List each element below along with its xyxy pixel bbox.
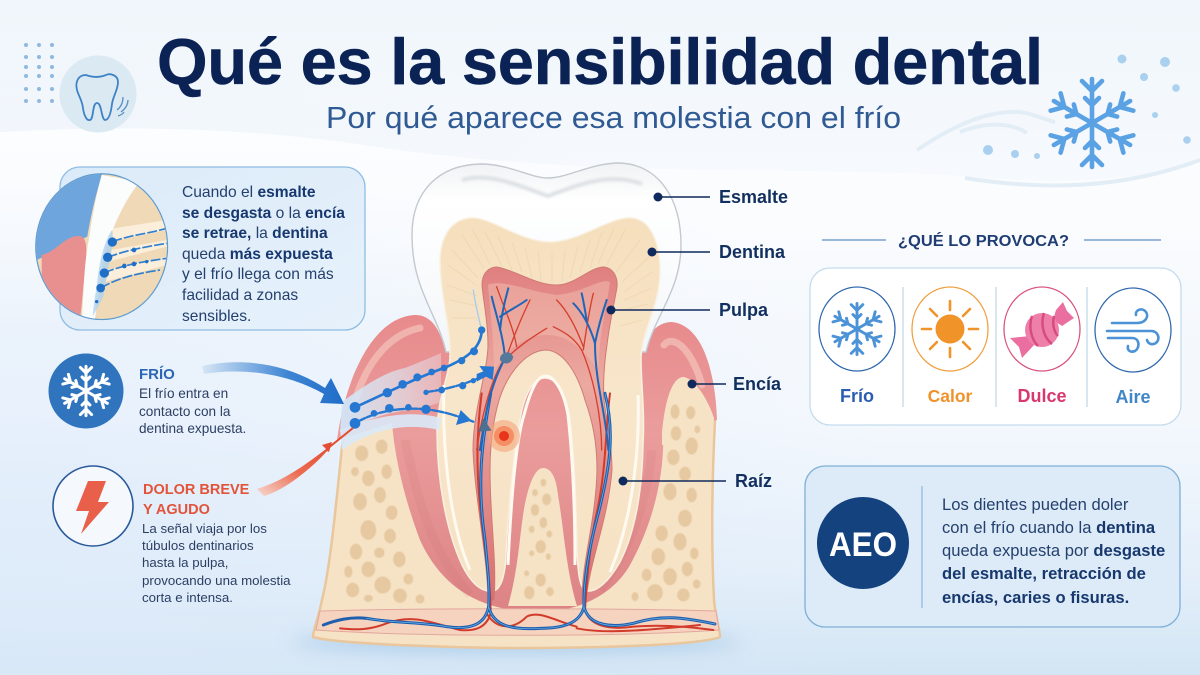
trigger: heat: Calor xyxy=(928,386,973,406)
text block: cold xyxy=(139,366,246,436)
right bone cap xyxy=(662,377,714,445)
panel text: se retrae, la dentina xyxy=(182,225,328,242)
text block: pain: corta e intensa. xyxy=(142,590,233,605)
panel text: facilidad a zonas xyxy=(182,287,298,304)
text block: pain: Y AGUDO xyxy=(143,502,210,518)
trigger: cold xyxy=(819,287,895,406)
label: Pulpa xyxy=(606,300,769,320)
arrow: cold to dentin xyxy=(202,362,344,404)
icon: pain bolt xyxy=(53,466,133,546)
inset: close-up of exposed dentin xyxy=(33,170,173,323)
heading: triggers: ¿QUÉ LO PROVOCA? xyxy=(898,231,1069,250)
text block: cold: contacto con la xyxy=(139,404,231,419)
text block: pain: hasta la pulpa, xyxy=(142,555,228,570)
panel text xyxy=(182,184,345,325)
AEO badge: AEO xyxy=(829,526,897,564)
decorative dot grid xyxy=(24,43,54,103)
translucent exposure band xyxy=(340,353,441,432)
panel text: queda más expuesta xyxy=(182,246,333,263)
trigger: air xyxy=(1095,288,1171,407)
label: Raíz: Raíz xyxy=(735,471,772,491)
summary text: encías, caries o fisuras. xyxy=(942,588,1129,607)
label: Encía xyxy=(688,374,782,394)
icon: cold circle xyxy=(48,354,124,428)
icon: sensitive tooth xyxy=(60,56,136,132)
dentin tubule striations xyxy=(447,228,652,326)
label: Esmalte: Esmalte xyxy=(719,187,788,207)
tooth anatomy diagram xyxy=(291,163,741,652)
panel text: se desgasta o la encía xyxy=(182,205,345,222)
text block: cold: FRÍO xyxy=(139,366,175,383)
panel: AEO summary xyxy=(805,466,1180,627)
panel text: y el frío llega con más xyxy=(182,266,334,283)
trigger: heat xyxy=(912,287,988,406)
text block: cold: El frío entra en xyxy=(139,386,228,401)
label: Dentina xyxy=(648,242,786,262)
icon: large snowflake with dots xyxy=(983,54,1191,167)
text block: pain: provocando una molestia xyxy=(142,573,291,588)
bone cavities xyxy=(344,404,701,604)
summary text: con el frío cuando la dentina xyxy=(942,518,1156,537)
summary text: queda expuesta por desgaste xyxy=(942,541,1165,560)
trigger: air: Aire xyxy=(1115,387,1151,407)
AEO badge xyxy=(817,497,909,589)
text block: pain xyxy=(142,482,291,605)
panel text: Cuando el esmalte xyxy=(182,184,316,201)
text block: pain: La señal viaja por los xyxy=(142,521,267,536)
pulp chamber and canals xyxy=(473,267,617,600)
gums and periodontal band xyxy=(337,315,717,612)
title: Qué es la sensibilidad dental xyxy=(157,25,1043,98)
summary text xyxy=(942,495,1165,607)
label: Dentina: Dentina xyxy=(719,242,786,262)
trigger: cold: Frío xyxy=(840,386,874,406)
panel: triggers xyxy=(810,268,1181,425)
enamel crown xyxy=(412,163,681,352)
pain point xyxy=(488,420,520,452)
label: Esmalte xyxy=(654,187,788,207)
jaw bone xyxy=(313,420,720,648)
panel text: sensibles. xyxy=(182,308,251,325)
panel: explanation card xyxy=(33,167,365,330)
summary text: del esmalte, retracción de xyxy=(942,564,1146,583)
nerve signal paths xyxy=(350,290,513,432)
text block: pain: DOLOR BREVE xyxy=(143,482,250,498)
label: Raíz xyxy=(618,471,772,491)
trigger: sweet: Dulce xyxy=(1017,386,1067,406)
text block: cold: dentina expuesta. xyxy=(139,421,246,436)
periodontal base strip xyxy=(316,609,719,635)
label: Encía: Encía xyxy=(733,374,782,394)
arrow: pain xyxy=(257,428,353,496)
dentin and roots xyxy=(437,218,660,591)
summary text: Los dientes pueden doler xyxy=(942,495,1129,514)
text block: pain: túbulos dentinarios xyxy=(142,538,254,553)
root cementum lines xyxy=(444,376,638,572)
trigger: sweet xyxy=(1004,287,1080,406)
central bone xyxy=(508,468,577,606)
subtitle: Por qué aparece esa molestia con el frío xyxy=(326,100,901,135)
nerves and blood vessels xyxy=(323,287,715,631)
label: Pulpa: Pulpa xyxy=(719,300,769,320)
